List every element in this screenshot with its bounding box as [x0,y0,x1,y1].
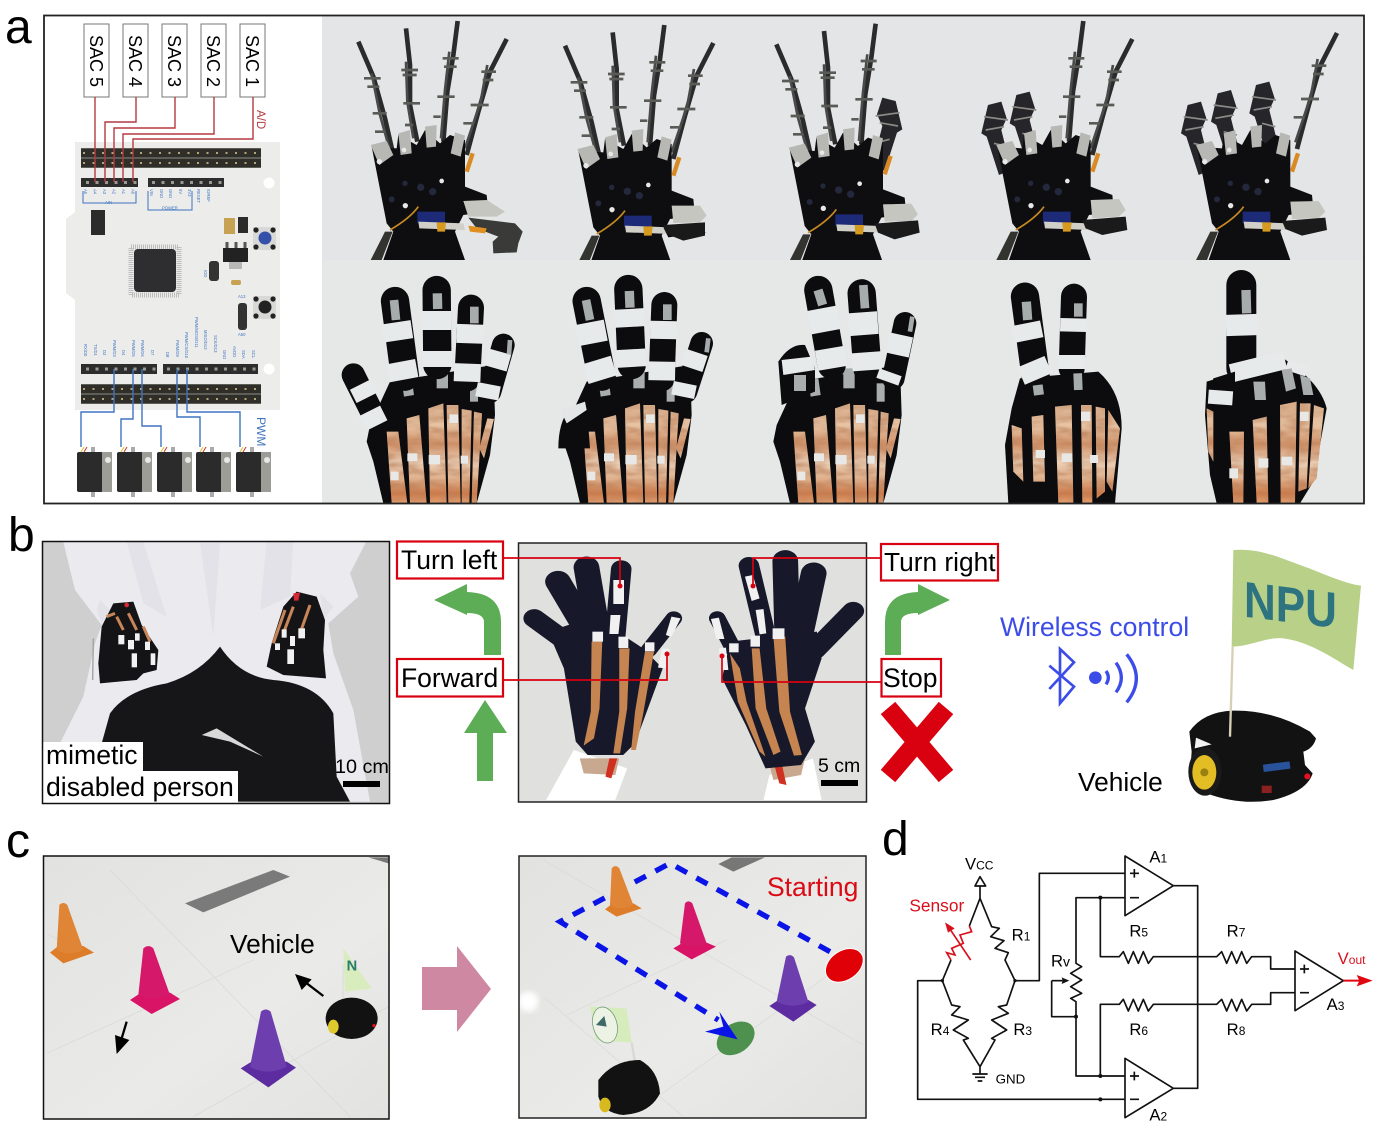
command: Stop: Stop [883,663,938,693]
circuit labels: R8 [1227,1020,1246,1039]
label b: b [8,509,35,562]
flag [1232,550,1361,670]
flag and robot car [589,1004,660,1115]
glove gesture 1 [353,290,510,503]
panel a: robot hands and gloves [44,16,1364,504]
control board: IOREF [206,189,211,202]
label d: d [882,813,909,866]
stop cross [888,708,946,776]
Wheatstone bridge [942,877,1015,1081]
pink cone [673,901,716,959]
control board [66,142,280,410]
arrow: forward [464,700,507,781]
glove gesture 3 [773,285,912,503]
blue PWM wires [81,369,240,447]
sensor glove row [353,285,1327,503]
floor scene with route [518,856,870,1118]
control board: PWM/D9 [175,340,180,357]
panel b: glove photo with commands [397,542,998,802]
red callout lines [504,558,881,682]
scale bar: 5 cm: 5 cm [818,755,860,777]
SAC sensor boxes: SAC 1 [242,35,262,87]
circuit labels: A3 [1327,995,1345,1014]
SAC sensor boxes [84,24,265,97]
PWM label: PWM [254,417,268,446]
control board: PWM/D5 [131,340,136,357]
control board: TX/D1 [93,344,98,357]
circuit labels: Sensor [909,896,964,916]
control board: AVDD [232,346,237,357]
robotic hand 1 [358,21,523,260]
control board: PWM/MOSI/D11 [194,317,199,348]
control board: SCL [251,350,256,359]
vehicle with NPU flag [1188,550,1361,802]
glove gesture 4 [1005,297,1122,503]
control board: AIN [105,200,112,205]
control board: D2 [102,350,107,356]
control board: D8 [165,352,170,358]
Vout arrow [1343,975,1373,986]
robotic hand row [358,21,1337,264]
control board: RX/D0 [83,344,88,357]
panel a border [44,16,1364,504]
route arrowhead [705,1012,738,1039]
glove photo backdrop [322,260,1364,503]
control board: D7 [150,350,155,356]
control board: PWM/D3 [112,340,117,357]
arrow: direction downward [115,1022,129,1054]
wireless control and vehicle [1000,550,1361,802]
pink cone [130,946,180,1014]
circuit labels: R1 [1012,926,1031,945]
control board: 5V [178,189,183,194]
control board: IOD [203,270,208,277]
circuit labels: R3 [1013,1020,1032,1039]
Vehicle label: Vehicle [230,929,315,959]
control board: PWM/CS/D10 [184,332,189,359]
caption: mimetic disabled person [43,740,238,803]
circuit wires [918,873,1295,1101]
label a: a [5,1,32,54]
control board: A2 [112,189,116,195]
red analog wires [95,97,253,182]
control board: PWM/D6 [140,340,145,357]
small vehicle [326,948,378,1039]
SAC sensor boxes: SAC 3 [164,35,184,87]
arrow: turn left [434,584,501,655]
arrow: pink transition [422,946,491,1032]
small vehicle: N [347,959,357,975]
control board: 3V3 [187,189,192,197]
orange cone [605,866,642,917]
icon: bluetooth and signal [1049,649,1136,703]
panel b centre border [518,543,866,802]
robotic hand 5 [1181,33,1337,260]
caption: mimetic disabled person: disabled person [46,772,234,802]
servo motors [77,447,271,497]
control board: VIN [149,189,154,196]
panel c right border [519,856,866,1118]
gloves photograph [518,543,866,802]
sensor resistor [945,922,972,960]
Arduino wiring diagram [66,24,280,497]
control board: A0 [130,189,136,195]
command: Turn left: Turn left [401,545,498,575]
circuit labels: R7 [1227,922,1246,941]
label c: c [6,815,30,868]
left glove [534,567,681,800]
control board: SDA [241,350,246,359]
circuit labels: Vout [1338,949,1366,968]
route: dashed blue path [560,863,830,1020]
right glove [711,561,853,800]
panel c left: vehicle on floor [43,856,389,1119]
Vehicle label: Vehicle [1078,767,1163,797]
op-amp A1 [1125,856,1173,916]
control board: GND [159,189,164,198]
circuit labels: VCC [965,854,994,873]
circuit labels: Rv [1051,952,1070,971]
control board: A3 [102,189,107,195]
robotic hand 2 [565,25,713,264]
start marker [819,941,870,989]
command: Forward: Forward [401,663,498,693]
panel c left border [44,856,389,1119]
callout dots [618,584,756,658]
control board: D4 [121,350,126,356]
flag: NPU [1244,572,1337,640]
control board: A13 [238,294,246,299]
A/D label: A/D [254,110,266,129]
control board: MISO/D12 [203,330,208,350]
panel d: amplifier circuit [909,847,1373,1125]
robot photo backdrop [322,16,1364,260]
caption: mimetic disabled person: mimetic [46,740,138,770]
arrow: turn right [885,584,950,655]
robotic hand 4 [981,21,1132,260]
control board: RESET [196,189,201,203]
robotic hand 3 [776,24,920,263]
control board: POWER [162,206,178,210]
control board: SCK/D13 [213,335,218,353]
SAC sensor boxes: SAC 4 [125,35,145,87]
end marker [710,1014,761,1062]
circuit labels: R4 [931,1020,950,1039]
floor scene [43,856,389,1119]
glove gesture 2 [558,289,708,503]
control board: A1 [121,189,126,195]
Wireless control label: Wireless control [1000,612,1189,642]
circuit labels: GND [996,1071,1025,1086]
control board: A50 [238,332,246,337]
op-amp A2 [1125,1058,1173,1118]
circuit labels: A2 [1149,1106,1167,1125]
command: Turn right: Turn right [884,547,996,577]
seated person illustration [42,541,389,803]
SAC sensor boxes: SAC 2 [203,35,223,87]
panel b: seated person photo [42,541,390,804]
control board: A4 [92,189,98,195]
purple cone [241,1009,296,1087]
control board: GND [222,350,227,359]
arrow: direction to vehicle [295,974,323,996]
control board: GND [168,189,173,198]
flag pole [1230,647,1233,737]
panel c right: path planning [518,856,870,1118]
panel b left border [42,542,390,804]
glove gesture 5 [1205,285,1327,503]
scale bar: 10 cm: 10 cm [335,756,389,778]
circuit labels [909,847,1366,1125]
circuit labels: R6 [1129,1020,1148,1039]
SAC sensor boxes: SAC 5 [86,35,106,87]
control board: A5 [83,189,88,195]
op-amp A3 [1295,951,1343,1011]
robot car [1188,711,1316,802]
circuit labels: A1 [1149,847,1167,866]
circuit labels: R5 [1129,922,1148,941]
purple cone [769,955,817,1022]
Starting label: Starting [767,872,858,902]
orange cone [50,903,94,963]
